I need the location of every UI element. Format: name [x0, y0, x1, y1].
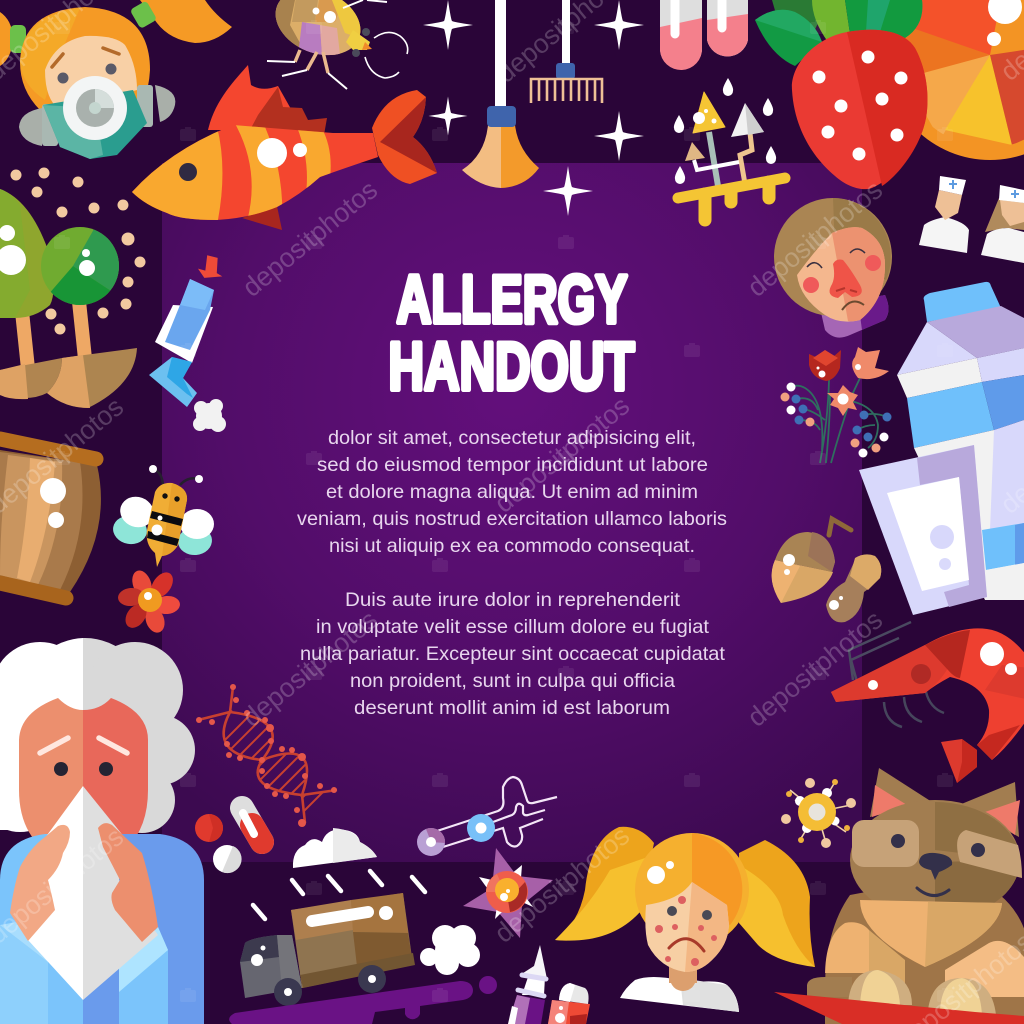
watermark text: depositphotos — [742, 175, 888, 303]
title — [388, 262, 634, 404]
icon: milk carton — [897, 282, 1024, 600]
text block: second paragraph: in voluptate velit esse cillum dolore eu fugiat — [316, 616, 710, 638]
icon: milk pack — [859, 445, 987, 615]
icon: orange slice — [905, 0, 1024, 160]
panel: central purple square — [162, 163, 862, 862]
icon: DNA helix — [196, 684, 338, 827]
text block: first paragraph: dolor sit amet, consectetur adipisicing elit, — [328, 427, 696, 449]
icon: spiky star germ — [463, 848, 553, 938]
icon: trees with pollen — [0, 168, 146, 368]
icon: old man with tissue — [0, 638, 204, 1024]
icon: rake — [531, 0, 602, 103]
text block: second paragraph: nulla pariatur. Excepteur sint occaecat cupidatat — [300, 643, 726, 665]
text block: second paragraph: non proident, sunt in culpa qui officia — [350, 670, 675, 692]
text block: second paragraph — [300, 589, 726, 719]
icon: acorn — [772, 519, 851, 603]
title: ALLERGY — [396, 262, 628, 338]
icon: twin pots — [0, 348, 137, 408]
icon: mushrooms — [674, 78, 785, 220]
icon: cat — [774, 768, 1024, 1024]
text block: first paragraph: sed do eiusmod tempor incididunt ut labore — [317, 454, 708, 476]
text block: first paragraph — [297, 427, 727, 557]
title: HANDOUT — [388, 328, 634, 404]
icon: sparkle stars — [423, 0, 644, 216]
text block: first paragraph: et dolore magna aliqua. Ut enim ad minim — [326, 481, 698, 503]
text block: second paragraph: Duis aute irure dolor in reprehenderit — [345, 589, 681, 611]
icon: inhaler — [149, 254, 226, 432]
icon: cloud with rain — [253, 828, 425, 919]
text block: first paragraph: veniam, quis nostrud exercitation ullamco laboris — [297, 508, 727, 530]
icon: shrimp — [831, 622, 1024, 783]
icon: girl with rash — [555, 827, 815, 1012]
icon: truck — [240, 893, 415, 1006]
icon: exhaust puff — [420, 925, 480, 975]
icon: red bottle — [548, 983, 590, 1024]
icon: girl with gas mask — [0, 0, 232, 159]
icon: test tubes — [660, 0, 748, 70]
icon: virus — [781, 778, 856, 848]
icon: bug — [267, 0, 408, 89]
icon: molecule — [417, 777, 557, 856]
icon: child with red nose — [774, 198, 892, 338]
icon: peanut — [826, 554, 881, 622]
icon: wooden barrel — [0, 439, 101, 598]
watermark text: depositphotos — [489, 391, 635, 519]
icon: pills — [195, 808, 262, 873]
watermark text: depositphotos — [489, 821, 635, 949]
icon: flower bouquet — [780, 347, 892, 463]
icon: broom — [462, 0, 539, 188]
watermark text: depositphotos — [742, 605, 888, 733]
icon: bee — [111, 465, 214, 567]
icon: fish — [120, 65, 437, 230]
icon: red flower — [117, 568, 181, 635]
icon: nasal spray — [508, 945, 547, 1024]
icon: strawberry — [755, 0, 928, 189]
text block: second paragraph: deserunt mollit anim id est laborum — [354, 697, 670, 719]
icon: nurses — [919, 176, 1024, 263]
text block: first paragraph: nisi ut aliquip ex ea commodo consequat. — [329, 535, 695, 557]
watermark text: depositphotos — [237, 175, 383, 303]
icon: purple road — [229, 976, 497, 1024]
watermark text: depositphotos — [237, 605, 383, 733]
